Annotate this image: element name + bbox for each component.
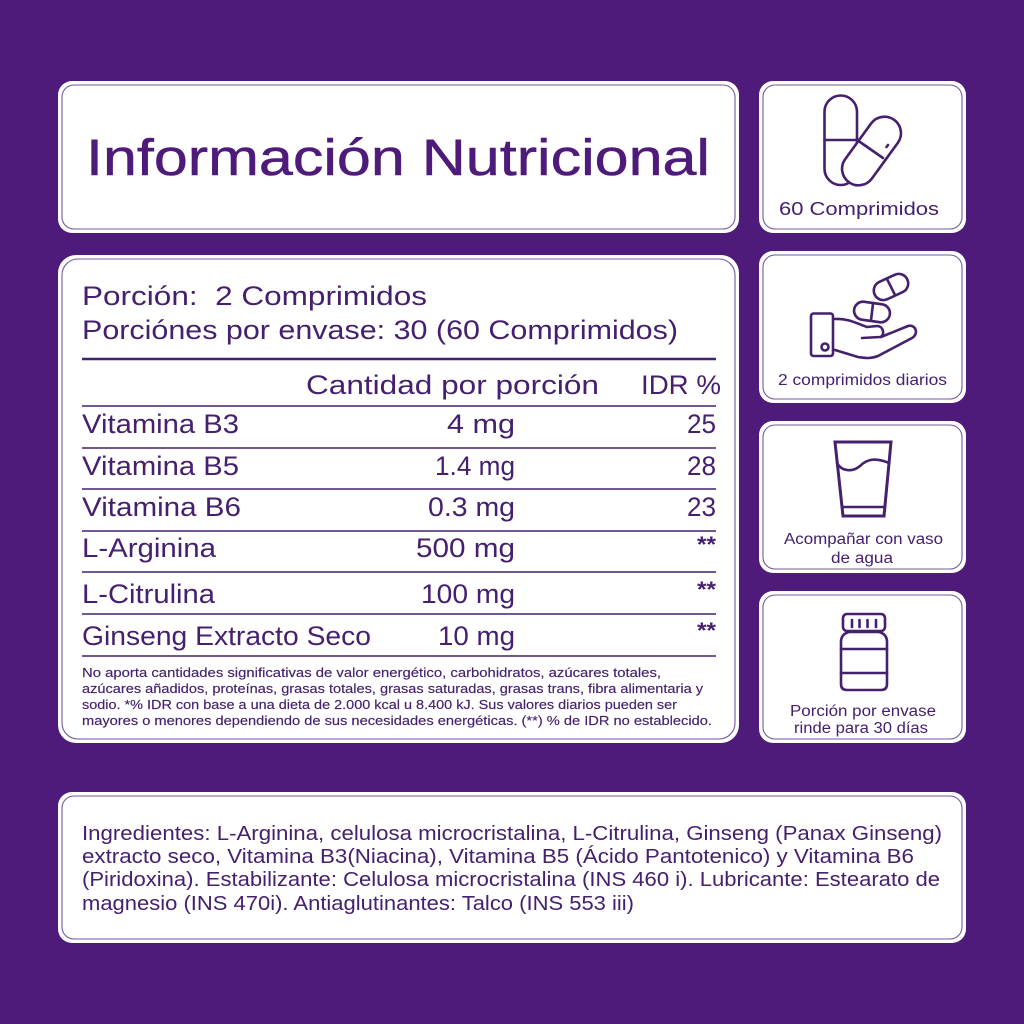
row: L-Citrulina <box>82 577 716 609</box>
icon: hand with tablets <box>811 271 916 358</box>
table header <box>306 370 721 400</box>
row: Ginseng Extracto Seco: ** <box>697 618 716 643</box>
table header: Cantidad por porción <box>306 370 599 400</box>
panel: ingredients <box>58 792 966 943</box>
panel: servings per bottle <box>759 591 966 743</box>
row: L-Arginina <box>82 532 716 563</box>
row: Vitamina B5: Vitamina B5 <box>82 451 239 481</box>
serving information: Porciónes por envase: 30 (60 Comprimidos) <box>82 315 678 345</box>
serving information <box>82 281 678 345</box>
footnote: mayores o menores dependiendo de sus necesidades energéticas. (**) % de IDR no establecido. <box>82 713 712 728</box>
ingredients text: (Piridoxina). Estabilizante: Celulosa microcristalina (INS 460 i). Lubricante: Estearato de <box>82 869 940 891</box>
row: Ginseng Extracto Seco: Ginseng Extracto Seco <box>82 621 371 651</box>
row: Ginseng Extracto Seco: 10 mg <box>438 621 515 651</box>
row: Vitamina B3 <box>82 409 716 439</box>
icon: bottle <box>841 614 887 690</box>
row: Vitamina B5 <box>82 451 716 481</box>
ingredients text <box>82 823 942 915</box>
row: Vitamina B3: Vitamina B3 <box>82 409 239 439</box>
row: Vitamina B5: 1.4 mg <box>435 451 515 481</box>
ingredients text: Ingredientes: L-Arginina, celulosa microcristalina, L-Citrulina, Ginseng (Panax Ginseng) <box>82 823 942 845</box>
panel: 60 comprimidos <box>759 81 966 233</box>
panel: title <box>58 81 739 233</box>
row: L-Citrulina: L-Citrulina <box>82 579 216 609</box>
ingredients text: magnesio (INS 470i). Antiaglutinantes: Talco (INS 553 iii) <box>82 893 634 915</box>
panel: 2 comprimidos diarios <box>759 251 966 403</box>
footnote <box>82 665 712 728</box>
label: Porción por envase <box>790 703 936 720</box>
footnote: No aporta cantidades significativas de valor energético, carbohidratos, azúcares totales, <box>82 665 661 680</box>
row: Vitamina B6: 23 <box>687 492 716 522</box>
footnote: azúcares añadidos, proteínas, grasas totales, grasas saturadas, grasas trans, fibra alimentaria y <box>82 681 704 696</box>
row: L-Arginina: L-Arginina <box>82 533 217 563</box>
row: Vitamina B3: 4 mg <box>447 409 515 439</box>
panel: nutrition table <box>58 255 739 743</box>
panel: glass of water <box>759 421 966 573</box>
row: L-Arginina: 500 mg <box>416 533 515 563</box>
row: Vitamina B6: 0.3 mg <box>428 492 515 522</box>
ingredients text: extracto seco, Vitamina B3(Niacina), Vitamina B5 (Ácido Pantotenico) y Vitamina B6 <box>82 845 914 868</box>
icon: glass <box>835 442 891 516</box>
label: de agua <box>831 550 893 567</box>
label <box>784 531 943 567</box>
table header: IDR % <box>641 370 721 400</box>
row: L-Arginina: ** <box>697 532 716 557</box>
row: Vitamina B3: 25 <box>687 409 716 439</box>
row: Vitamina B6: Vitamina B6 <box>82 492 241 522</box>
label: Acompañar con vaso <box>784 531 943 548</box>
title: Información Nutricional <box>86 129 710 186</box>
label <box>790 703 936 737</box>
footnote: sodio. *% IDR con base a una dieta de 2.000 kcal u 8.400 kJ. Sus valores diarios pueden ser <box>82 697 678 712</box>
label: 60 Comprimidos <box>779 199 939 219</box>
row: Vitamina B6 <box>82 492 716 522</box>
row: L-Citrulina: ** <box>697 577 716 602</box>
label: rinde para 30 días <box>794 720 928 737</box>
label: 2 comprimidos diarios <box>778 372 947 389</box>
row: Vitamina B5: 28 <box>687 451 716 481</box>
serving information: Porción: 2 Comprimidos <box>82 281 427 311</box>
row: L-Citrulina: 100 mg <box>421 579 515 609</box>
icon: capsules <box>824 96 907 192</box>
row: Ginseng Extracto Seco <box>82 618 716 651</box>
